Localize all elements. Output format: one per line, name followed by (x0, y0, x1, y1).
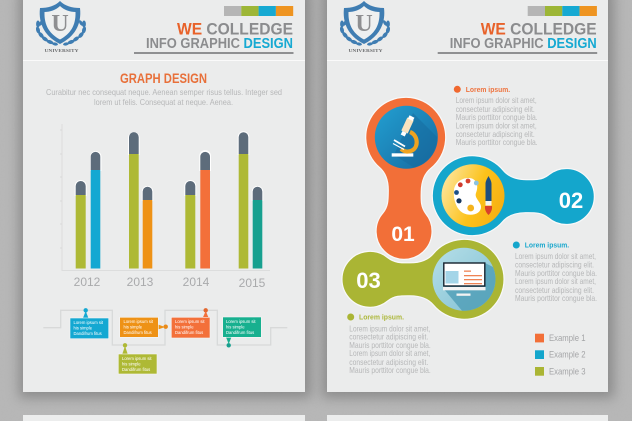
panel: bottom right page (327, 415, 608, 421)
text block 2: consectetur adipiscing elit. (515, 285, 594, 295)
year labels (74, 275, 266, 290)
step: red: Dandifrum fitus (175, 330, 203, 335)
text block 3: Lorem ipsum. (359, 313, 404, 322)
title line 2: INFO GRAPHIC DESIGN (450, 36, 597, 52)
text block 2: consectetur adipiscing elit. (515, 260, 594, 270)
step: olive (118, 343, 157, 374)
text block 1: Lorem ipsum dolor sit amet, (456, 95, 537, 105)
text block 3 (347, 313, 431, 375)
step: blue: his simple (74, 326, 93, 330)
panel: right page (327, 0, 608, 392)
blob 02: blue (432, 155, 595, 237)
text block 2: Lorem ipsum. (525, 241, 569, 250)
U letter: U (355, 11, 373, 37)
step: teal (223, 317, 261, 347)
text block 3: Lorem ipsum dolor sit amet, (349, 324, 430, 334)
bars 2013 (128, 132, 153, 268)
title line 1: WE COLLEDGE (481, 20, 597, 38)
text block 2 (513, 241, 597, 303)
text block 1 (454, 85, 538, 147)
text block 1: Lorem ipsum dolor sit amet, (456, 120, 537, 130)
panel: left page (23, 0, 305, 392)
step: teal: his simple (226, 324, 245, 330)
bars 2014 (184, 150, 211, 268)
bars 2015 (238, 131, 263, 268)
text block 3: Lorem ipsum dolor sit amet, (349, 348, 430, 358)
step: olive: Lorem ipsum sit (122, 356, 152, 361)
text block 1: consectetur adipiscing elit. (456, 129, 535, 139)
intro text: lorem ut felis. Consequat at neque. Aenea. (94, 97, 233, 107)
step: orange: Lorem ipsum sit (124, 319, 154, 324)
year labels: 2015 (239, 276, 266, 290)
colour strip (528, 6, 597, 16)
text block 1: Lorem ipsum. (466, 85, 510, 94)
bars 2012 (75, 151, 102, 268)
title line 1: WE COLLEDGE (177, 20, 293, 38)
text block 2: Mauris porttitor congue bla. (515, 293, 597, 303)
text block 3: consectetur adipiscing elit. (349, 357, 428, 367)
flow diagram (43, 308, 287, 374)
text block 2: Lorem ipsum dolor sit amet, (515, 251, 596, 261)
heading: graph design: GRAPH DESIGN (120, 71, 207, 86)
bar chart (60, 124, 270, 290)
icon: palette and brush (442, 164, 504, 227)
text block 1: consectetur adipiscing elit. (456, 104, 535, 114)
blob 01: orange (364, 97, 446, 260)
title line 2: INFO GRAPHIC DESIGN (146, 36, 293, 52)
text block 1: Mauris porttitor congue bla. (456, 112, 538, 122)
colour strip (224, 6, 293, 16)
step: olive: Dandifrum fitus (122, 367, 150, 372)
step: orange: Dandifrum fitus (124, 330, 152, 335)
text block 2: Mauris porttitor congue bla. (515, 268, 597, 278)
connector line (43, 310, 287, 345)
legend (535, 333, 586, 377)
step: orange (120, 317, 168, 337)
number 02: 02 (559, 188, 583, 213)
step: teal: Lorem ipsum sit (226, 319, 256, 324)
title rule (438, 52, 597, 54)
step: red: his simple (175, 324, 194, 330)
step: olive: his simple (122, 362, 141, 366)
text block 3: Mauris porttitor congue bla. (349, 365, 431, 375)
year labels: 2013 (127, 275, 154, 289)
header: left page (35, 1, 293, 54)
logo caption: UNIVERSITY (44, 48, 79, 53)
laurels (35, 20, 87, 46)
legend: Example 3 (549, 366, 586, 377)
step: red: Lorem ipsum sit (175, 319, 205, 324)
step: teal: Dandifrum fitus (226, 330, 254, 335)
legend: Example 1 (549, 333, 586, 344)
step: blue: Dandifrum fitus (74, 331, 102, 336)
logo caption: UNIVERSITY (348, 48, 383, 53)
panel: bottom left page (23, 415, 305, 421)
year labels: 2012 (74, 275, 101, 289)
year labels: 2014 (183, 275, 210, 289)
legend: Example 2 (549, 350, 586, 361)
laurels (339, 20, 391, 46)
number 03: 03 (356, 268, 381, 293)
axes (62, 124, 270, 270)
text block 3: consectetur adipiscing elit. (349, 332, 428, 342)
step: orange: his simple (124, 324, 143, 330)
U letter: U (51, 11, 69, 37)
step: blue (70, 308, 109, 339)
step: blue: Lorem ipsum sit (74, 320, 104, 325)
intro text: Curabitur nec consequat neque. Aenean semper risus tellus. Integer sed (46, 87, 282, 97)
icon: microscope (375, 106, 438, 169)
title rule (134, 52, 294, 54)
text block 1: Mauris porttitor congue bla. (456, 137, 538, 147)
logo (339, 1, 391, 53)
text block 2: Lorem ipsum dolor sit amet, (515, 276, 596, 286)
icon: computer monitor (432, 248, 496, 311)
step: red (171, 308, 210, 338)
logo (35, 1, 87, 53)
intro text (46, 87, 282, 107)
text block 3: Mauris porttitor congue bla. (349, 340, 431, 350)
number 01: 01 (391, 223, 415, 246)
header: right page (339, 1, 597, 54)
blob 03: olive (342, 239, 504, 319)
